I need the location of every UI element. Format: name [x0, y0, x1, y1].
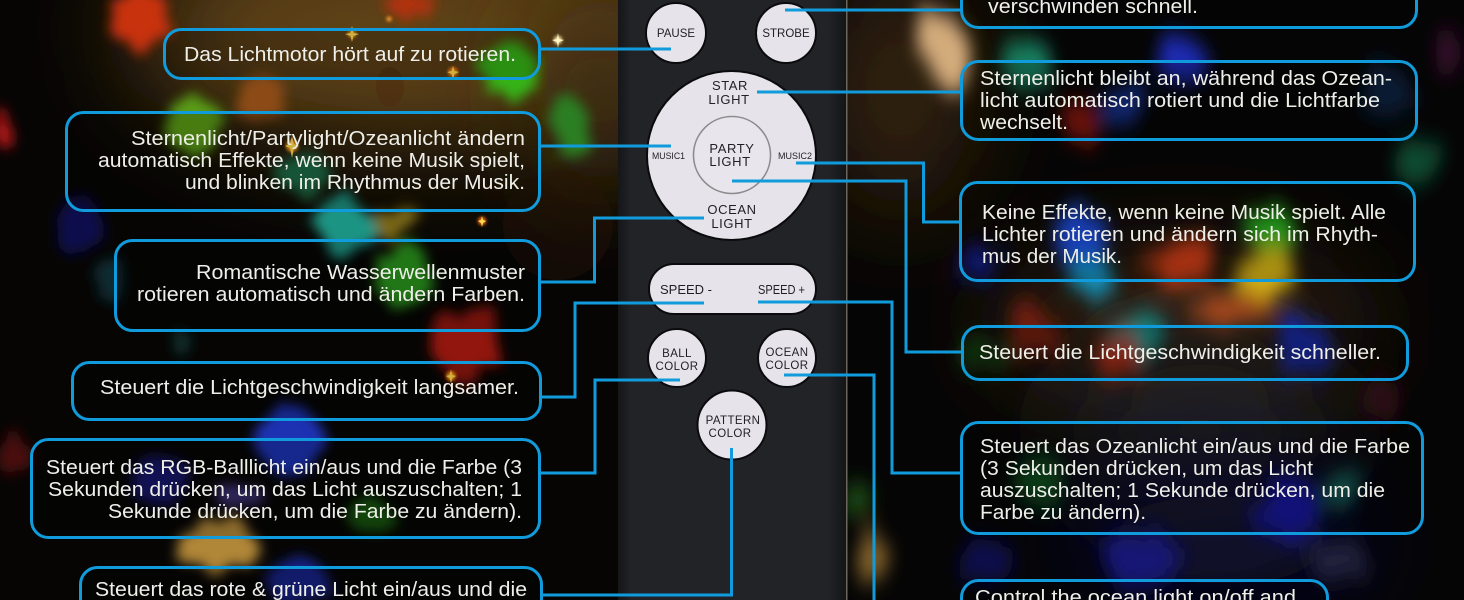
callout: speed plus: Steuert die Lichtgeschwindigkeit schneller.	[979, 341, 1381, 364]
callout: ocean light	[116, 240, 540, 330]
callout: music 1: automatisch Effekte, wenn keine Musik spielt,	[98, 149, 525, 172]
callout: ocean light: rotieren automatisch und ändern Farben.	[137, 283, 525, 306]
photo background: left light effects	[0, 0, 730, 600]
callout: pattern color	[80, 568, 542, 600]
button: strobe: STROBE	[762, 28, 810, 40]
button: pause	[646, 3, 706, 63]
star sparks	[286, 16, 562, 381]
button: pattern color: COLOR	[709, 428, 751, 440]
callout: ocean light: Romantische Wasserwellenmuster	[196, 261, 525, 284]
button: ocean color	[758, 329, 816, 387]
button: speed pill: SPEED +	[758, 282, 805, 297]
callout: music 1: Sternenlicht/Partylight/Ozeanlicht ändern	[131, 127, 525, 150]
button: ball color: COLOR	[656, 361, 698, 373]
callout: ocean color: Farbe zu ändern).	[980, 501, 1146, 524]
remote control	[618, 0, 848, 600]
callout: music 2: Keine Effekte, wenn keine Musik spielt. Alle	[982, 201, 1386, 224]
callout: speed minus: Steuert die Lichtgeschwindigkeit langsamer.	[100, 376, 519, 399]
button: light wheel: OCEAN	[707, 202, 757, 217]
photo background: right light effects	[830, 0, 1464, 600]
callout: ocean color: Steuert das Ozeanlicht ein/aus und die Farbe	[980, 435, 1410, 458]
callout: music 1: und blinken im Rhythmus der Musik.	[185, 171, 525, 194]
button: light wheel: PARTY	[709, 141, 755, 156]
callout: strobe	[962, 0, 1416, 28]
callout: ocean color: (3 Sekunden drücken, um das Licht	[980, 457, 1313, 480]
callout: ball color: Steuert das RGB-Balllicht ein/aus und die Farbe (3	[46, 456, 522, 479]
button: speed pill	[649, 264, 816, 314]
button: ball color: BALL	[662, 348, 692, 360]
button: light wheel: LIGHT	[709, 154, 751, 169]
callout: ocean color: auszuschalten; 1 Sekunde drücken, um die	[980, 479, 1385, 502]
button: light wheel: MUSIC2	[778, 151, 812, 162]
callout: speed plus	[962, 326, 1408, 380]
decorative circle bokeh	[503, 170, 613, 280]
button: light wheel: LIGHT	[708, 92, 750, 107]
button: light wheel: STAR	[712, 78, 748, 93]
callout: star light: Sternenlicht bleibt an, während das Ozean-	[980, 67, 1392, 90]
callout: english ocean control	[962, 580, 1328, 600]
callout: pause: Das Lichtmotor hört auf zu rotieren.	[184, 43, 516, 66]
callout: star light	[962, 62, 1416, 140]
button: ball color	[648, 329, 706, 387]
button: ocean color: COLOR	[766, 360, 808, 372]
button: ocean color: OCEAN	[766, 347, 808, 359]
callout: music 2	[960, 182, 1414, 280]
button: strobe	[756, 3, 816, 63]
callout: star light: licht automatisch rotiert und die Lichtfarbe	[980, 89, 1380, 112]
callout: ball color	[32, 440, 540, 538]
button: pattern color: PATTERN	[706, 415, 760, 427]
callout: music 2: Lichter rotieren und ändern sich im Rhyth-	[982, 223, 1378, 246]
callout: ocean color	[962, 422, 1422, 534]
callout: ball color: Sekunde drücken, um die Farbe zu ändern).	[108, 500, 522, 523]
button: light wheel: MUSIC1	[652, 151, 685, 162]
callout: music 1	[66, 112, 540, 210]
callout: star light: wechselt.	[979, 111, 1068, 134]
button: pause: PAUSE	[657, 28, 695, 40]
button: pattern color	[698, 390, 766, 460]
callout: music 2: mus der Musik.	[982, 245, 1122, 268]
button: speed pill: SPEED -	[660, 282, 712, 297]
callout: pause	[164, 30, 540, 78]
callout: speed minus	[72, 362, 540, 420]
connector lines	[540, 10, 962, 600]
callout: ball color: Sekunden drücken, um das Licht auszuschalten; 1	[48, 478, 522, 501]
button: light wheel	[647, 71, 816, 240]
button: light wheel: LIGHT	[711, 216, 753, 231]
